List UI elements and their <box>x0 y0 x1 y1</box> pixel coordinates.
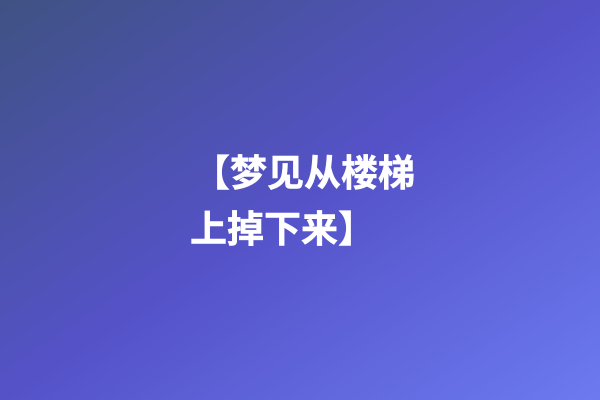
title line 1: 【梦见从楼梯 <box>193 153 415 194</box>
title <box>190 153 415 250</box>
title line 2: 上掉下来】 <box>190 209 375 250</box>
